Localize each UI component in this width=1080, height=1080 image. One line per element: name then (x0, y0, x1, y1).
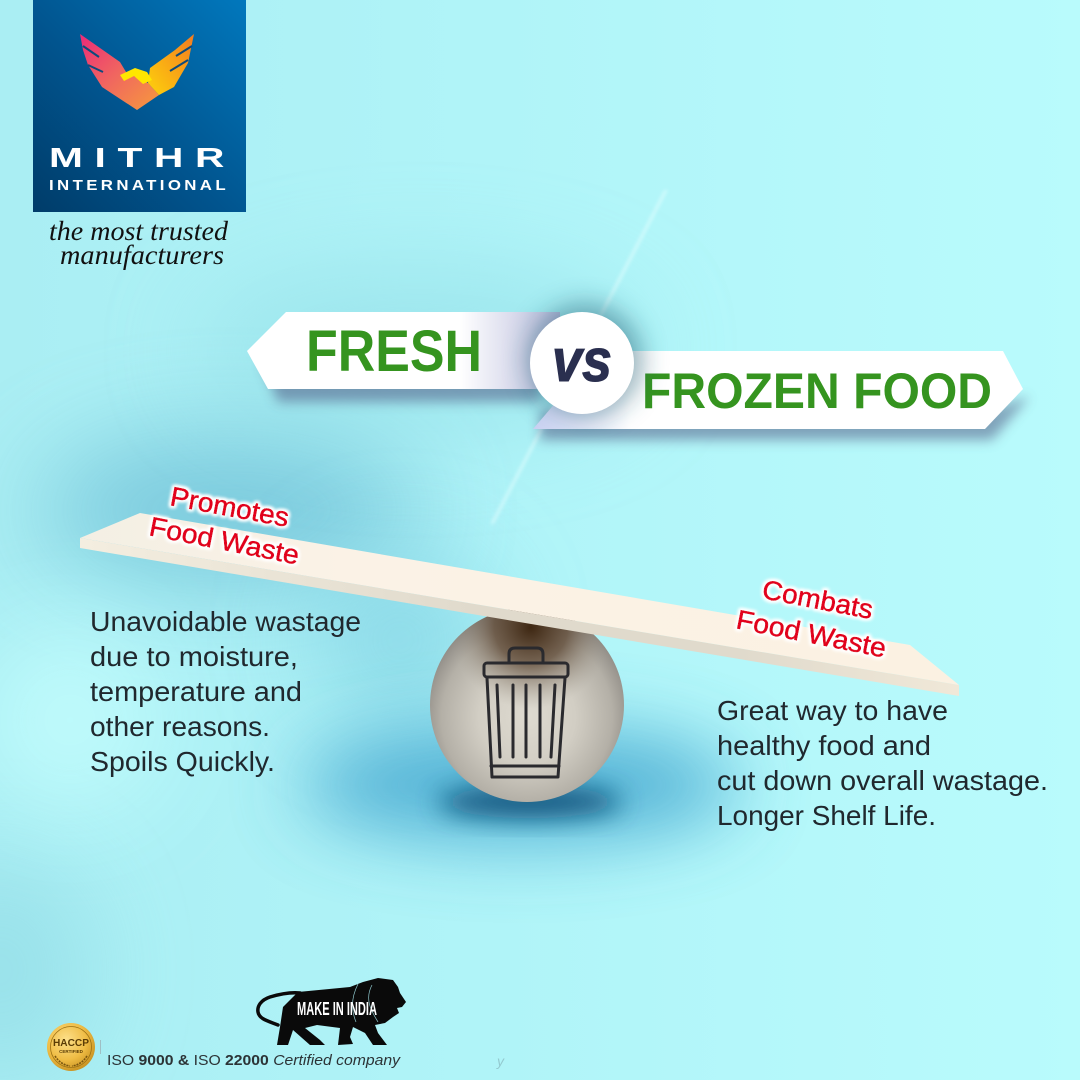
icon: HACCP seal: CERTIFIED (59, 1049, 84, 1054)
seesaw board (80, 513, 959, 696)
icon: HACCP seal (47, 1023, 95, 1071)
text block: fresh food description: other reasons. (90, 711, 270, 742)
label: Combats Food Waste (734, 574, 889, 663)
icon: trash can (484, 648, 568, 777)
tagline: manufacturers (60, 240, 224, 270)
tagline: the most trusted (49, 216, 229, 246)
icon: winged handshake (80, 34, 194, 110)
certification text (100, 1040, 505, 1069)
text block: frozen food description (717, 695, 1048, 831)
badge: vs (528, 304, 642, 416)
text block: fresh food description (90, 606, 361, 777)
text block: frozen food description: cut down overall wastage. (717, 765, 1048, 796)
label: Combats Food Waste: Food Waste (734, 604, 889, 663)
label: Combats Food Waste: Combats (760, 574, 876, 625)
text block: frozen food description: healthy food and (717, 730, 931, 761)
icon: HACCP seal: HACCP (53, 1038, 89, 1049)
heading: FRESH: FRESH (306, 319, 482, 384)
text block: frozen food description: Longer Shelf Life. (717, 800, 936, 831)
logo wordmark: INTERNATIONAL: INTERNATIONAL (49, 177, 229, 194)
banner: FROZEN FOOD (533, 351, 1030, 440)
text block: fresh food description: Unavoidable wastage (90, 606, 361, 637)
badge: vs: vs (552, 327, 612, 394)
certification text: ISO 9000 & ISO 22000 Certified company (107, 1052, 402, 1069)
heading: FROZEN FOOD: FROZEN FOOD (642, 363, 992, 419)
text block: fresh food description: temperature and (90, 676, 302, 707)
label: Promotes Food Waste (147, 481, 302, 570)
logo wordmark: MITHR: MITHR (49, 142, 236, 173)
banner: FRESH (247, 312, 560, 402)
label: Promotes Food Waste: Promotes (168, 481, 291, 533)
tagline (49, 216, 229, 270)
text block: frozen food description: Great way to have (717, 695, 948, 726)
text block: fresh food description: due to moisture, (90, 641, 298, 672)
icon: Make in India lion (258, 978, 406, 1045)
certification text: y (496, 1053, 505, 1069)
label: Promotes Food Waste: Food Waste (147, 511, 302, 570)
icon: Make in India lion: MAKE IN INDIA (297, 999, 377, 1019)
text block: fresh food description: Spoils Quickly. (90, 746, 275, 777)
logo: Mithr International (33, 0, 246, 212)
ball with trash icon (430, 608, 624, 802)
